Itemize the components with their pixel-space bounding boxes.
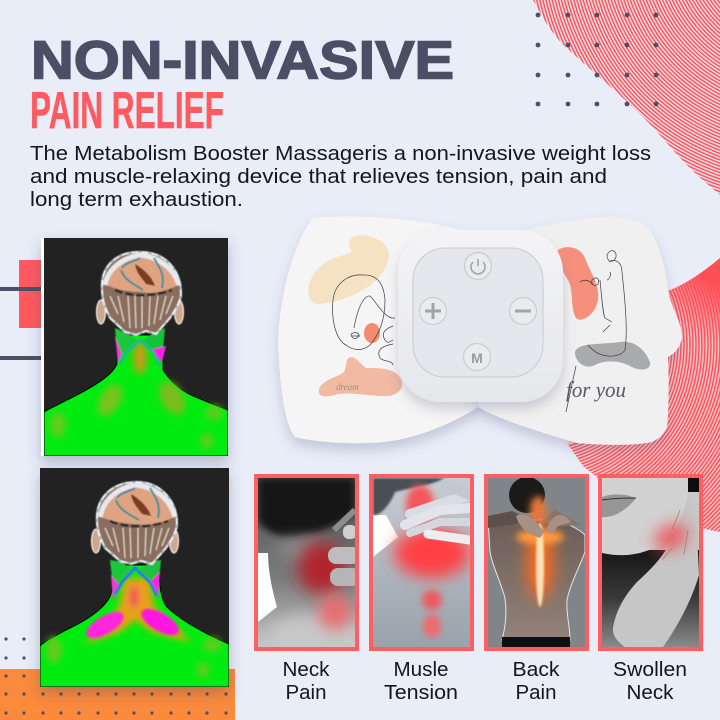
photo card: swollen neck [598,474,703,651]
photo card: back pain [484,474,589,651]
M button: M [471,350,483,366]
massager device [278,216,682,445]
subtitle: pain relief: PAIN RELIEF [30,82,224,140]
thermal photo: after [40,468,229,687]
left wing pad [278,216,500,443]
background line wave: right side [567,258,720,532]
caption: neck pain [282,659,331,704]
caption: back pain: Back [512,659,561,681]
decorative dot grid [536,13,658,106]
background line wave: top right [533,0,720,195]
caption: swollen neck [613,659,687,704]
caption: neck pain: Pain [286,682,326,704]
photo card: neck pain [254,474,359,651]
title: non-invasive: NON-INVASIVE [31,32,454,90]
thermal photo: before [41,238,228,456]
M button [464,344,490,370]
caption: back pain [512,659,561,704]
left accent block and lines [0,260,43,360]
description text: and muscle-relaxing device that relieves tension, pain and [30,165,607,188]
description text [30,142,651,211]
caption: muscle tension [384,659,458,704]
caption: muscle tension: Musle [394,659,448,681]
minus button [510,298,536,324]
right illustration: for you [566,377,626,402]
control unit [398,230,563,402]
caption: back pain: Pain [516,682,556,704]
left illustration [308,235,402,396]
caption: swollen neck: Neck [626,682,675,704]
description text: The Metabolism Booster Massageris a non-invasive weight loss [30,142,651,165]
left illustration: dream [336,382,359,392]
description text: long term exhaustion. [30,188,243,211]
photo card: muscle tension [369,474,474,651]
power button [464,252,492,280]
caption: swollen neck: Swollen [613,659,687,681]
right illustration [557,247,650,412]
right wing pad [478,217,682,445]
caption: muscle tension: Tension [384,682,458,704]
orange dotted block [0,637,235,720]
plus button [420,298,446,324]
caption: neck pain: Neck [282,659,331,681]
